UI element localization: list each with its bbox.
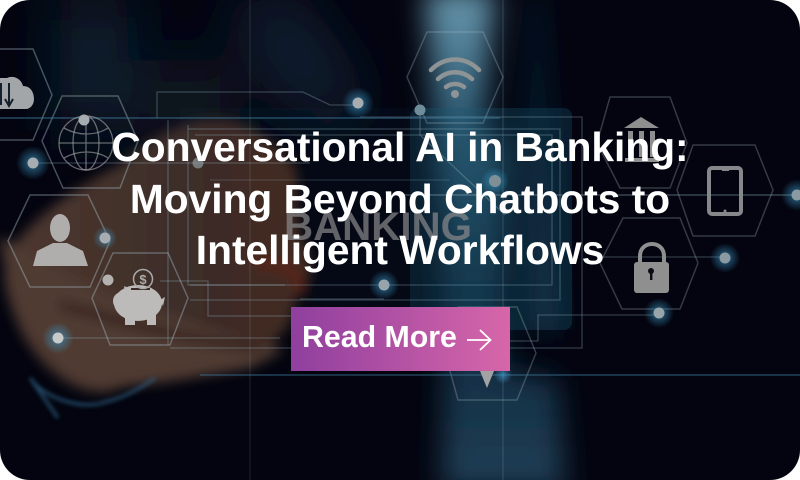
icon: person — [33, 214, 88, 266]
icon: dollar coin — [134, 270, 152, 288]
button label: Read More — [302, 321, 457, 354]
hand — [0, 120, 311, 393]
icon: wifi — [431, 60, 479, 97]
icon: tablet — [709, 168, 741, 214]
icon: dollar coin: $ — [139, 272, 147, 287]
icon: padlock — [634, 244, 669, 293]
icon: cloud transfer — [0, 77, 34, 109]
hexagon outlines — [0, 32, 773, 400]
icon: globe — [59, 116, 113, 170]
horizontal light lines — [200, 374, 800, 376]
glowing network nodes — [16, 87, 800, 384]
shirt and tie glow — [425, 0, 566, 480]
title: Conversational AI in Banking: — [111, 124, 689, 170]
title — [111, 124, 689, 273]
icon: piggy bank — [113, 285, 165, 325]
title: Intelligent Workflows — [196, 227, 604, 273]
screen panel — [180, 108, 572, 330]
icon: chat pointer — [480, 371, 494, 388]
title: Moving Beyond Chatbots to — [130, 176, 670, 222]
banking word on screen: BANKING — [284, 205, 472, 249]
read more button — [291, 307, 510, 371]
icon: arrow — [467, 329, 492, 351]
icon: bank building — [624, 117, 659, 162]
sleeve cuff — [30, 378, 155, 418]
